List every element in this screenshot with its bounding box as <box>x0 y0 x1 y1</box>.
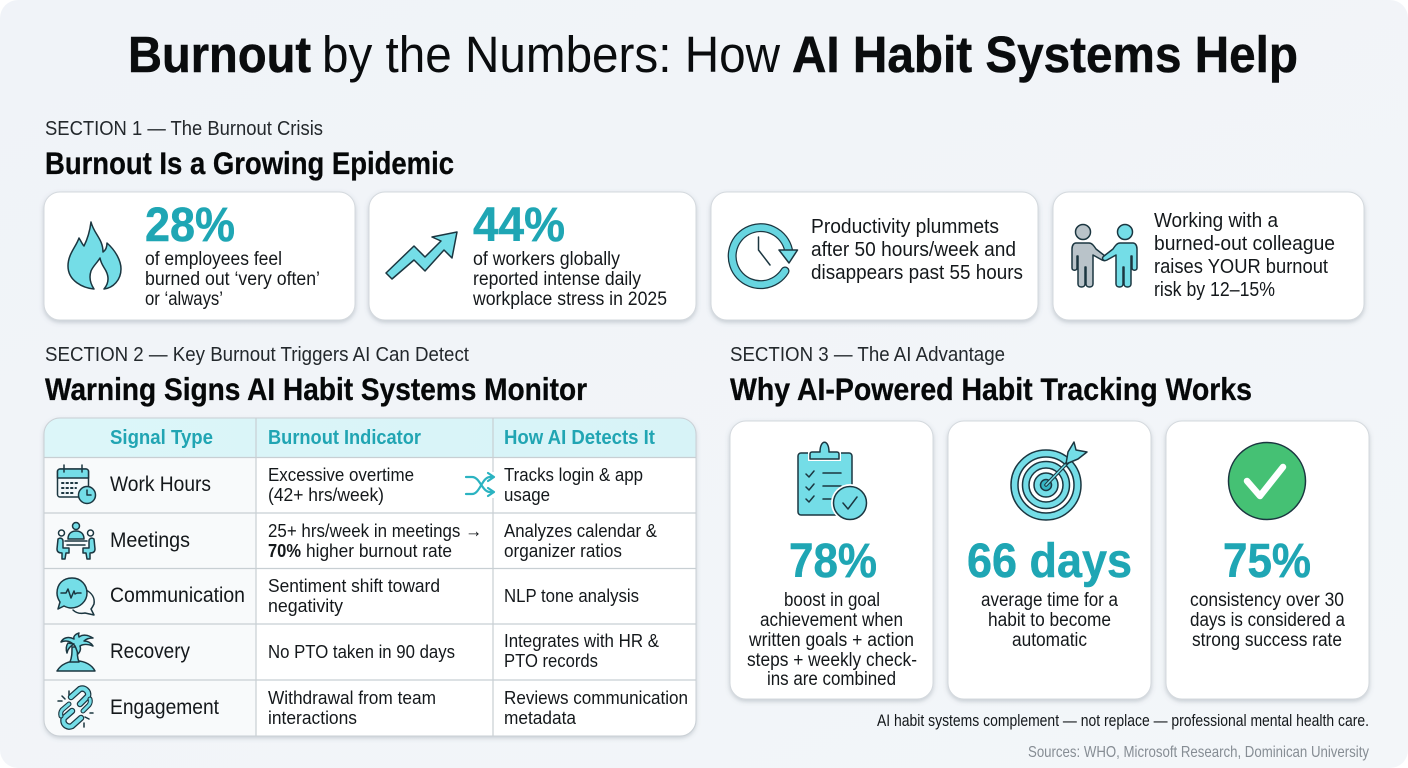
description: strong success rate <box>1192 630 1342 651</box>
icon: clipboard with check badge <box>798 442 869 522</box>
icon: rising arrow <box>386 232 457 279</box>
panel: 44% stat card <box>369 192 696 320</box>
row: work hours: usage <box>504 484 550 505</box>
description <box>747 590 917 690</box>
panel: colleague card <box>1053 192 1364 320</box>
row: recovery: Recovery <box>110 640 190 663</box>
icon: green check <box>1228 442 1306 520</box>
description: burned-out colleague <box>1154 233 1335 255</box>
row: work hours: Excessive overtime <box>268 464 414 485</box>
description: Working with a <box>1154 210 1279 232</box>
icon: target with arrow <box>1011 442 1087 520</box>
icon: shuffle arrows <box>466 472 500 498</box>
stat: 75%: 75% <box>1223 535 1311 588</box>
description: average time for a <box>981 590 1118 611</box>
row: meetings: 25+ hrs/week in meetings → <box>268 520 482 541</box>
row: recovery <box>57 630 660 671</box>
section 1 label: SECTION 1 — The Burnout Crisis <box>45 118 323 140</box>
row: meetings: Meetings <box>110 529 190 552</box>
panel: 66 days card <box>948 421 1151 699</box>
title: Burnout <box>128 26 311 83</box>
description: or ‘always’ <box>145 289 223 310</box>
row: meetings: higher burnout rate <box>306 540 452 561</box>
row: communication: NLP tone analysis <box>504 585 639 606</box>
row: engagement: Engagement <box>110 696 219 719</box>
panel: 28% stat card <box>44 192 355 320</box>
row: recovery: PTO records <box>504 650 598 671</box>
row: work hours <box>58 464 643 505</box>
row: meetings: 70% <box>268 540 301 561</box>
title: AI Habit Systems Help <box>792 26 1298 83</box>
row: meetings: Analyzes calendar & <box>504 520 658 541</box>
icon: speech bubbles <box>57 578 94 615</box>
icon: palm island <box>57 633 95 671</box>
stat: 44%: 44% <box>473 199 565 252</box>
stat: 78%: 78% <box>789 535 877 588</box>
row: recovery: Integrates with HR & <box>504 630 660 651</box>
description: habit to become <box>988 610 1111 631</box>
section 2 label: SECTION 2 — Key Burnout Triggers AI Can Detect <box>45 344 469 366</box>
section 3 heading: Why AI-Powered Habit Tracking Works <box>730 371 1252 407</box>
description <box>811 216 1023 284</box>
description: risk by 12–15% <box>1154 279 1275 301</box>
row: engagement: Reviews communication <box>504 687 688 708</box>
panel: warning signs table <box>44 418 696 736</box>
icon: handshake <box>1072 224 1137 287</box>
row: engagement: Withdrawal from team <box>268 687 436 708</box>
description: after 50 hours/week and <box>811 239 1016 261</box>
description: workplace stress in 2025 <box>472 289 667 310</box>
stat: 66 days: 66 days <box>967 535 1132 588</box>
icon: clock with arrow <box>732 228 798 285</box>
row: communication: negativity <box>268 595 344 616</box>
row: work hours: (42+ hrs/week) <box>268 484 384 505</box>
table header: Signal Type <box>110 427 213 449</box>
panel: 78% card <box>730 421 933 699</box>
description <box>981 590 1118 651</box>
description: achievement when <box>760 610 903 631</box>
row: recovery: No PTO taken in 90 days <box>268 641 455 662</box>
row: work hours: Tracks login & app <box>504 464 643 485</box>
panel: productivity card <box>711 192 1038 320</box>
title <box>128 26 1298 83</box>
table header: How AI Detects It <box>504 427 655 449</box>
section 3 label: SECTION 3 — The AI Advantage <box>730 344 1005 366</box>
description: ins are combined <box>767 669 896 690</box>
description: written goals + action <box>748 630 914 651</box>
description: burned out ‘very often’ <box>145 269 320 290</box>
section 2 heading: Warning Signs AI Habit Systems Monitor <box>45 371 587 407</box>
icon: flame <box>68 222 121 289</box>
row: engagement <box>58 687 688 728</box>
row: communication <box>57 575 639 616</box>
table header: Burnout Indicator <box>268 427 421 449</box>
panel: 75% card <box>1166 421 1369 699</box>
stat: 28%: 28% <box>145 199 235 252</box>
description: raises YOUR burnout <box>1154 256 1328 278</box>
row: meetings <box>57 520 658 561</box>
row: communication: Sentiment shift toward <box>268 575 440 596</box>
description: boost in goal <box>784 590 880 611</box>
description: days is considered a <box>1190 610 1345 631</box>
description: of employees feel <box>145 249 282 270</box>
row: communication: Communication <box>110 584 245 607</box>
row: engagement: metadata <box>504 707 577 728</box>
description: of workers globally <box>473 249 620 270</box>
description <box>472 249 667 310</box>
table header <box>110 427 655 449</box>
section 1 heading: Burnout Is a Growing Epidemic <box>45 145 454 181</box>
icon: calendar with clock <box>58 465 96 504</box>
row: engagement: interactions <box>268 707 357 728</box>
title: by the Numbers: How <box>322 26 780 83</box>
row: meetings: organizer ratios <box>504 540 622 561</box>
description: consistency over 30 <box>1190 590 1344 611</box>
description <box>1154 210 1335 301</box>
description <box>145 249 320 310</box>
description: reported intense daily <box>473 269 641 290</box>
description: steps + weekly check- <box>747 650 917 671</box>
description: automatic <box>1012 630 1087 651</box>
icon: broken chain link <box>58 689 93 727</box>
description: Productivity plummets <box>811 216 999 238</box>
description <box>1190 590 1345 651</box>
description: disappears past 55 hours <box>811 262 1023 284</box>
row: work hours: Work Hours <box>110 473 211 496</box>
icon: meeting table <box>57 522 95 559</box>
